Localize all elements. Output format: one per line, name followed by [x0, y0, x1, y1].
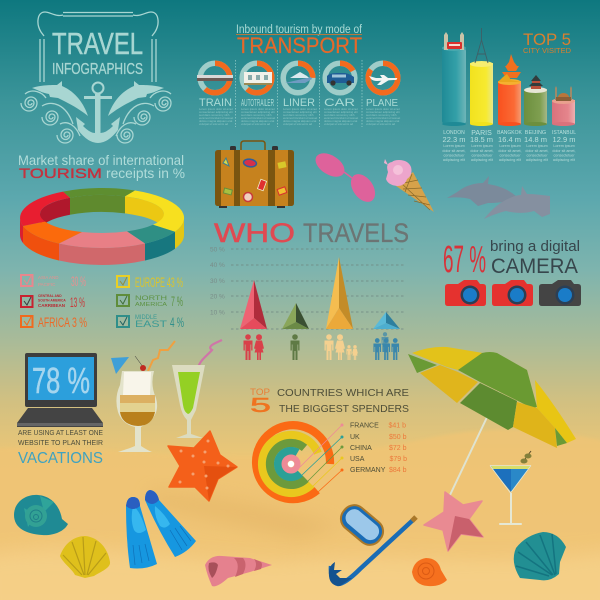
city body text: adipiscing elit: [553, 158, 575, 162]
icon: orange starfish: [168, 431, 237, 501]
transport body text: volutpat ut wisi enim ad: [366, 122, 396, 126]
legend: africa: AFRICA 3 %: [38, 314, 87, 330]
pyramid bar 4: [373, 312, 400, 329]
icon: hurricane cocktail: [111, 341, 175, 452]
y axis labels: 40 %: [210, 262, 225, 269]
icon: green cocktail: [172, 340, 222, 438]
transport body text: dolore magna aliquam erat: [241, 119, 274, 123]
icon: snorkel: [329, 517, 416, 586]
pyramid bar 1: [240, 280, 267, 329]
city labels: 16.4 m: [498, 135, 521, 144]
transport body text: Lorem ipsum dolor sit amet: [324, 107, 358, 111]
top 5 cities chart: [442, 28, 576, 162]
leader lines: [297, 424, 344, 492]
spend values: $50 b: [389, 434, 407, 441]
legend: africa: [21, 314, 87, 330]
pyramid bar 2: [282, 303, 309, 329]
icon: beach umbrella: [408, 347, 576, 495]
icon: yellow scallop shell: [60, 536, 110, 578]
icon: diving mask: [335, 499, 389, 551]
transport body text: euismod tincidunt ut laoreet: [199, 116, 233, 120]
y axis labels: 10 %: [210, 310, 225, 316]
sand dunes: [0, 430, 600, 600]
transport body text: euismod tincidunt ut laoreet: [241, 116, 275, 120]
logo subtitle: INFOGRAPHICS: [52, 61, 143, 78]
city body text: dolor sit amet,: [498, 149, 522, 153]
transport labels: AUTOTRAILER: [241, 98, 274, 109]
city labels: BEIJING: [525, 130, 546, 136]
market share section: 30 %: [71, 273, 86, 289]
city body text: [442, 144, 576, 162]
transport body text: sed diam nonummy nibh: [366, 113, 397, 117]
icon: paris: [475, 28, 488, 63]
icon: flippers: [126, 490, 196, 568]
chart title: TOP 5: [523, 30, 571, 49]
anchor: [76, 82, 120, 143]
transport body text: consectetuer adipiscing elit: [241, 110, 275, 114]
transport body text: Lorem ipsum dolor sit amet: [366, 107, 400, 111]
icon: orange shell: [412, 558, 447, 586]
market share section: 13 %: [70, 294, 85, 310]
icon: couple: [244, 334, 264, 360]
market share section: receipts in %: [106, 165, 185, 181]
transport body text: dolore magna aliquam erat: [366, 119, 399, 123]
spend values: $41 b: [388, 422, 406, 430]
y axis labels: 50 %: [210, 246, 225, 254]
legend: central and south america: [21, 294, 85, 310]
icon: suitcase: [215, 141, 294, 208]
city labels: 14.8 m: [524, 135, 547, 144]
city body text: Lorem ipsum: [499, 144, 521, 148]
city labels: BANGKOK: [497, 130, 523, 136]
legend: middle east: MIDDLE: [135, 315, 157, 321]
transport labels: PLANE: [366, 98, 398, 109]
country labels: UK: [350, 434, 360, 441]
market share heading: Market share of international: [18, 152, 184, 168]
transport body text: consectetuer adipiscing elit: [199, 110, 233, 114]
transport body text: dolore magna aliquam erat: [199, 119, 232, 123]
city body text: dolor sit amet,: [470, 149, 494, 153]
camera section: [443, 238, 581, 306]
chart subtitle: CITY VISITED: [523, 48, 571, 55]
logo frame: [38, 12, 158, 82]
transport body text: sed diam nonummy nibh: [324, 113, 355, 117]
city body text: consectetuer: [499, 154, 521, 158]
icon: teal nautilus shell: [14, 495, 68, 535]
city body text: adipiscing elit: [499, 158, 521, 162]
city labels: 22.3 m: [443, 135, 465, 144]
legend: asia and pacific: [21, 273, 86, 289]
legend: central and south america: CARRIBEAN: [38, 303, 65, 308]
transport body text: volutpat ut wisi enim ad: [199, 122, 229, 126]
camera section: CAMERA: [491, 255, 578, 278]
city labels: 18.5 m: [470, 135, 493, 144]
transport title: TRANSPORT: [237, 33, 362, 58]
city body text: consectetuer: [471, 154, 493, 158]
tourism heading: TOURISM: [19, 165, 102, 181]
city body text: Lorem ipsum: [526, 144, 548, 148]
transport body text: Lorem ipsum dolor sit amet: [241, 107, 275, 111]
vacations: VACATIONS: [18, 450, 103, 467]
transport body text: euismod tincidunt ut laoreet: [366, 116, 400, 120]
city labels: PARIS: [471, 130, 492, 137]
legend: central and south america: SOUTH AMERICA: [38, 298, 66, 302]
transport body text: Lorem ipsum dolor sit amet: [199, 107, 233, 111]
y axis labels: 20 %: [210, 294, 225, 300]
legend: middle east: EAST: [135, 319, 168, 329]
icon: london: [444, 32, 464, 50]
city body text: consectetuer: [553, 154, 575, 158]
legend: middle east: 4 %: [170, 314, 184, 330]
logo: travel infographics: [21, 12, 171, 143]
city labels: LONDON: [443, 130, 465, 136]
legend: asia and pacific: PACIFIC: [38, 282, 56, 287]
icon: pink starfish: [424, 492, 483, 551]
legend: middle east: [117, 314, 184, 330]
spend values: $79 b: [390, 456, 407, 463]
city body text: adipiscing elit: [526, 158, 548, 162]
legend: europe: [117, 274, 183, 290]
country labels: FRANCE: [350, 422, 379, 430]
city body text: Lorem ipsum: [471, 144, 493, 148]
transport body text: Lorem ipsum dolor sit amet: [283, 107, 317, 111]
3d donut chart: [20, 188, 184, 265]
legend: asia and pacific: ASIA AND: [38, 275, 59, 280]
transport rings: [200, 63, 398, 93]
icon: plane: [369, 75, 397, 85]
icon: pink spiral shell: [205, 556, 272, 586]
laptop stat: WEBSITE TO PLAN THEIR: [18, 440, 103, 447]
spend values: $84 b: [389, 467, 407, 474]
top 5 spenders: [250, 387, 409, 499]
transport body text: euismod tincidunt ut laoreet: [324, 116, 358, 120]
spenders heading: COUNTRIES WHICH ARE: [277, 387, 409, 399]
icon: group: [373, 332, 399, 360]
who travels chart: TRAVELS: [303, 218, 409, 248]
city body text: adipiscing elit: [471, 158, 493, 162]
country labels: USA: [350, 456, 365, 463]
spend values: $72 b: [389, 445, 407, 452]
logo dolphins: [32, 81, 164, 116]
who travels title: WHO: [214, 218, 295, 248]
market share section: 7 %: [171, 293, 183, 309]
icon: single person: [290, 334, 300, 360]
legend: north america: [117, 293, 183, 309]
transport body text: sed diam nonummy nibh: [241, 113, 272, 117]
logo waves: [21, 91, 171, 143]
icon: family: [324, 334, 358, 360]
icon: teal scallop shell: [514, 532, 566, 580]
who travels chart: [210, 218, 409, 360]
icon: red camera: [492, 280, 533, 306]
country labels: [350, 422, 386, 474]
laptop caption: ARE USING AT LEAST ONE: [18, 430, 103, 437]
icon: train: [197, 75, 233, 81]
spend values: [388, 422, 407, 474]
market share section: [18, 152, 185, 330]
camera text: bring a digital: [490, 238, 580, 255]
pyramid bar 3: [326, 257, 353, 329]
transport body text: [199, 107, 400, 126]
y axis labels: 30 %: [210, 278, 225, 285]
transport body text: sed diam nonummy nibh: [199, 113, 230, 117]
top 5 spenders: 5: [250, 395, 271, 417]
icon: beijing: [529, 75, 543, 89]
transport body text: dolore magna aliquam erat: [324, 119, 357, 123]
icon: sunglasses: [311, 148, 380, 206]
country labels: GERMANY: [350, 467, 386, 474]
city labels: [443, 130, 576, 144]
city body text: dolor sit amet,: [525, 149, 549, 153]
icon: car: [327, 73, 354, 86]
transport labels: CAR: [324, 97, 355, 109]
country labels: CHINA: [350, 445, 372, 452]
transport body text: consectetuer adipiscing elit: [283, 110, 317, 114]
icon: liner: [285, 72, 312, 83]
icon: red camera: [445, 280, 486, 306]
transport body text: euismod tincidunt ut laoreet: [283, 116, 317, 120]
transport body text: consectetuer adipiscing elit: [324, 110, 358, 114]
transport labels: LINER: [283, 97, 315, 109]
cylinders: [442, 45, 575, 126]
icon: laptop: [17, 353, 103, 427]
laptop percent: 78 %: [32, 360, 90, 401]
city body text: consectetuer: [526, 154, 548, 158]
city body text: consectetuer: [443, 154, 465, 158]
legend: central and south america: CENTRAL AND: [38, 294, 62, 298]
transport body text: volutpat ut wisi enim ad: [283, 122, 313, 126]
icon: istanbul: [555, 86, 572, 101]
transport section: [197, 24, 400, 127]
icon: dark camera: [539, 280, 581, 306]
icon: autotrailer: [244, 72, 272, 85]
transport body text: consectetuer adipiscing elit: [366, 110, 400, 114]
city body text: dolor sit amet,: [442, 149, 466, 153]
legend: north america: AMERICA: [135, 302, 167, 308]
camera section: 67 %: [443, 239, 486, 281]
city body text: Lorem ipsum: [443, 144, 465, 148]
spenders top label: TOP: [250, 387, 270, 397]
city body text: Lorem ipsum: [553, 144, 575, 148]
transport body text: volutpat ut wisi enim ad: [324, 122, 354, 126]
laptop stat: [17, 353, 103, 467]
transport labels: [199, 97, 398, 109]
radial bar chart: [256, 425, 330, 499]
logo title: TRAVEL: [52, 26, 143, 61]
city labels: 12.9 m: [553, 135, 575, 144]
icon: bangkok: [498, 54, 521, 82]
icon: martini: [490, 451, 532, 525]
city labels: ISTANBUL: [552, 130, 576, 136]
transport body text: dolore magna aliquam erat: [283, 119, 316, 123]
icon: ice cream: [384, 159, 434, 212]
transport heading: Inbound tourism by mode of: [236, 24, 363, 36]
legend: north america: NORTH: [135, 295, 167, 302]
icon: dolphins: [447, 176, 550, 219]
transport body text: volutpat ut wisi enim ad: [241, 122, 271, 126]
city body text: dolor sit amet,: [552, 149, 576, 153]
transport body text: sed diam nonummy nibh: [283, 113, 314, 117]
y axis labels: [210, 246, 225, 316]
top 5 spenders: THE BIGGEST SPENDERS: [279, 403, 409, 415]
transport labels: TRAIN: [199, 97, 232, 109]
city body text: adipiscing elit: [443, 158, 465, 162]
legend: europe: EUROPE 43 %: [135, 274, 183, 290]
